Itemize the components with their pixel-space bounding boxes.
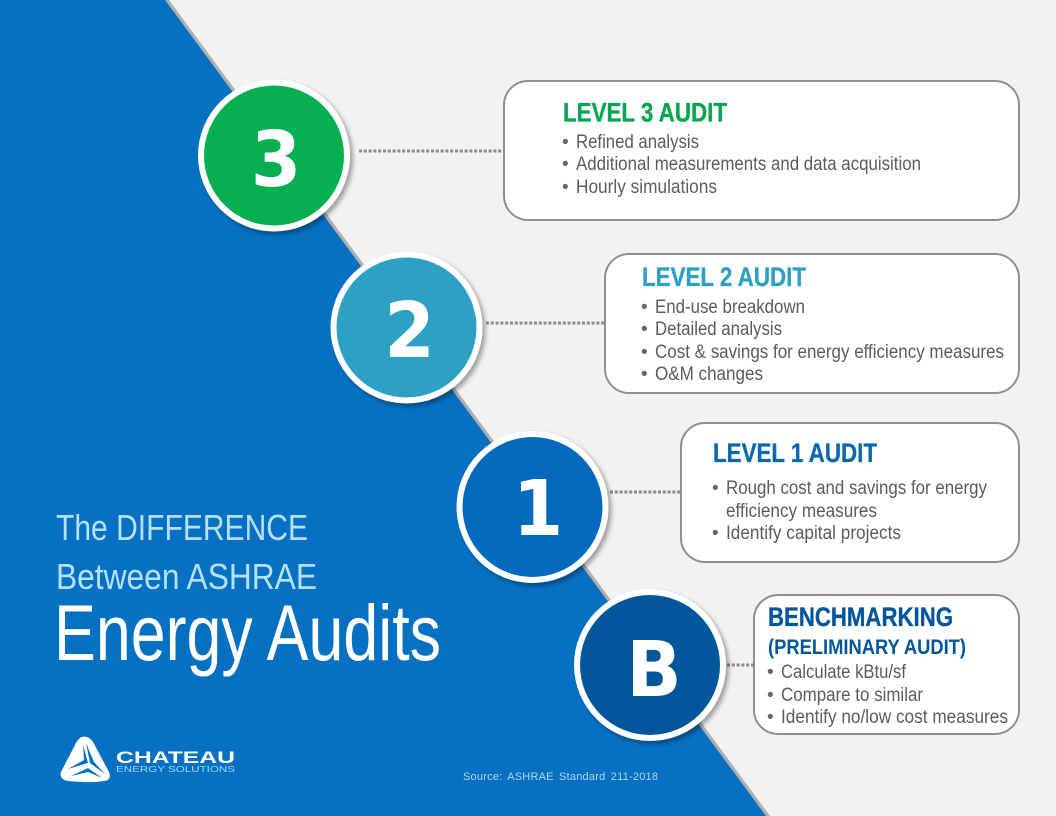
list: level 2 items	[641, 297, 1004, 385]
badge: benchmarking: B	[626, 625, 682, 715]
title: Between ASHRAE	[56, 556, 317, 597]
list: level 2 items: O&M changes	[655, 364, 763, 385]
logo: chateau energy solutions: ENERGY SOLUTIONS	[116, 764, 235, 774]
source note: Source: ASHRAE Standard 211-2018	[463, 771, 658, 783]
badge: level 2	[330, 252, 482, 404]
list: benchmarking items: Identify no/low cost measures	[781, 707, 1008, 728]
list: benchmarking items: Compare to similar	[781, 685, 924, 706]
heading: level 2 audit: LEVEL 2 AUDIT	[642, 262, 806, 292]
connector: benchmarking	[727, 664, 754, 666]
badge: level 1	[456, 431, 608, 583]
badge: level 3: 3	[251, 115, 301, 205]
list: level 2 items: End-use breakdown	[655, 297, 805, 318]
list: level 2 items: •	[641, 297, 648, 318]
panel: level 1 audit	[681, 423, 1019, 562]
title	[54, 507, 441, 677]
title: The DIFFERENCE	[56, 507, 308, 548]
badge: level 1: 1	[513, 464, 563, 554]
title: Energy Audits	[54, 588, 441, 677]
list: benchmarking items: •	[767, 707, 774, 728]
badge: benchmarking	[574, 589, 726, 741]
list: level 3 items: •	[562, 177, 569, 198]
list: level 1 items	[712, 478, 987, 544]
list: level 3 items: Refined analysis	[576, 132, 699, 153]
list: level 3 items: Additional measurements and data acquisition	[576, 154, 921, 175]
list: level 2 items: •	[641, 364, 648, 385]
list: level 3 items	[562, 132, 921, 198]
panel: benchmarking	[754, 595, 1019, 734]
list: level 2 items: •	[641, 342, 648, 363]
logo: chateau energy solutions	[61, 737, 235, 782]
heading: level 1 audit: LEVEL 1 AUDIT	[713, 438, 877, 468]
list: level 1 items: •	[712, 478, 719, 499]
list: benchmarking items: •	[767, 685, 774, 706]
list: level 3 items: Hourly simulations	[576, 177, 717, 198]
subheading: preliminary audit: (PRELIMINARY AUDIT)	[768, 636, 966, 659]
connector: level 2	[486, 322, 605, 324]
panel: level 2 audit	[605, 254, 1019, 393]
icon: triangular logo mark	[61, 737, 110, 782]
list: level 2 items: Detailed analysis	[655, 319, 782, 340]
list: level 3 items: •	[562, 154, 569, 175]
list: level 3 items: •	[562, 132, 569, 153]
logo: chateau energy solutions: CHATEAU	[116, 748, 235, 767]
list: benchmarking items: •	[767, 662, 774, 683]
panel: level 3 audit	[504, 81, 1019, 220]
list: level 1 items: efficiency measures	[726, 501, 877, 522]
badge: level 2: 2	[384, 286, 435, 376]
connector: level 1	[610, 490, 681, 494]
badge: level 3	[198, 80, 350, 232]
heading: benchmarking: BENCHMARKING	[768, 602, 953, 632]
diagonal blue background panel	[0, 0, 770, 816]
connector: level 3	[359, 150, 503, 152]
list: level 1 items: Identify capital projects	[726, 523, 901, 544]
list: benchmarking items	[767, 662, 1008, 728]
list: level 1 items: Rough cost and savings for energy	[726, 478, 987, 499]
heading: level 3 audit: LEVEL 3 AUDIT	[563, 98, 727, 128]
list: benchmarking items: Calculate kBtu/sf	[781, 662, 907, 683]
list: level 1 items: •	[712, 523, 719, 544]
list: level 2 items: Cost & savings for energy efficiency measures	[655, 342, 1004, 363]
list: level 2 items: •	[641, 319, 648, 340]
